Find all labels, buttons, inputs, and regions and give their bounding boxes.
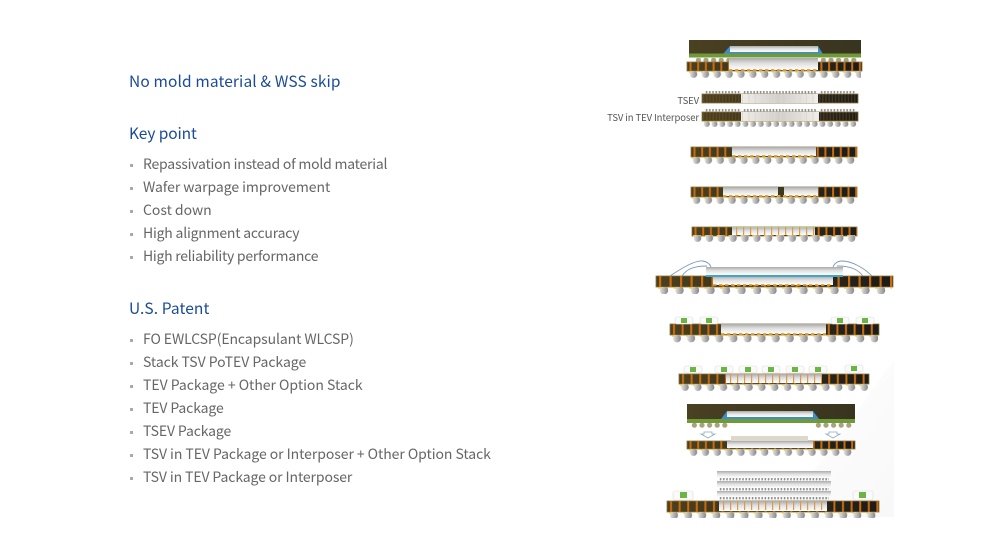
package 3: TSV in TEV interposer	[702, 109, 858, 127]
package 10: separated top and bottom packages with arrows	[687, 404, 855, 456]
list: patents	[130, 329, 491, 487]
package 6: TSV die	[692, 227, 857, 243]
list: patents: FO EWLCSP(Encapsulant WLCSP)	[143, 329, 354, 349]
package 5: dual die	[691, 187, 857, 204]
list: key points: Wafer warpage improvement	[143, 177, 330, 197]
package 11: stacked dies on interposer	[667, 471, 879, 518]
faint background corner	[780, 360, 894, 517]
heading: U.S. patent: U.S. Patent	[129, 297, 209, 319]
title: No mold material & WSS skip	[129, 70, 341, 92]
list: patents: TSV in TEV Package or Interposer + Other Option Stack	[143, 444, 491, 464]
label: TSV in TEV Interposer: TSV in TEV Interposer	[607, 110, 699, 124]
bond wires	[670, 261, 872, 276]
list: key points: High reliability performance	[143, 246, 318, 266]
list: patents: TSV in TEV Package or Interposer	[143, 467, 352, 487]
list: key points	[130, 154, 387, 266]
package 4: single die	[691, 147, 857, 164]
package 9: TSV interposer with top packages	[679, 365, 869, 391]
list: patents: TEV Package + Other Option Stack	[143, 375, 363, 395]
label: TSEV: TSEV	[677, 93, 699, 107]
list: patents: Stack TSV PoTEV Package	[143, 352, 306, 372]
package 2: TSEV	[702, 91, 858, 103]
package 8: top packages at edges	[670, 317, 879, 343]
list: key points: Cost down	[143, 200, 212, 220]
package 7: wire-bonded die stack	[656, 261, 893, 294]
package 1: top package stacked on bottom package	[687, 40, 862, 78]
icon: arrows	[701, 432, 840, 438]
list: patents: TSEV Package	[143, 421, 231, 441]
heading: key point: Key point	[129, 122, 197, 144]
list: key points: High alignment accuracy	[143, 223, 299, 243]
list: patents: TEV Package	[143, 398, 224, 418]
list: key points: Repassivation instead of mold material	[143, 154, 387, 174]
